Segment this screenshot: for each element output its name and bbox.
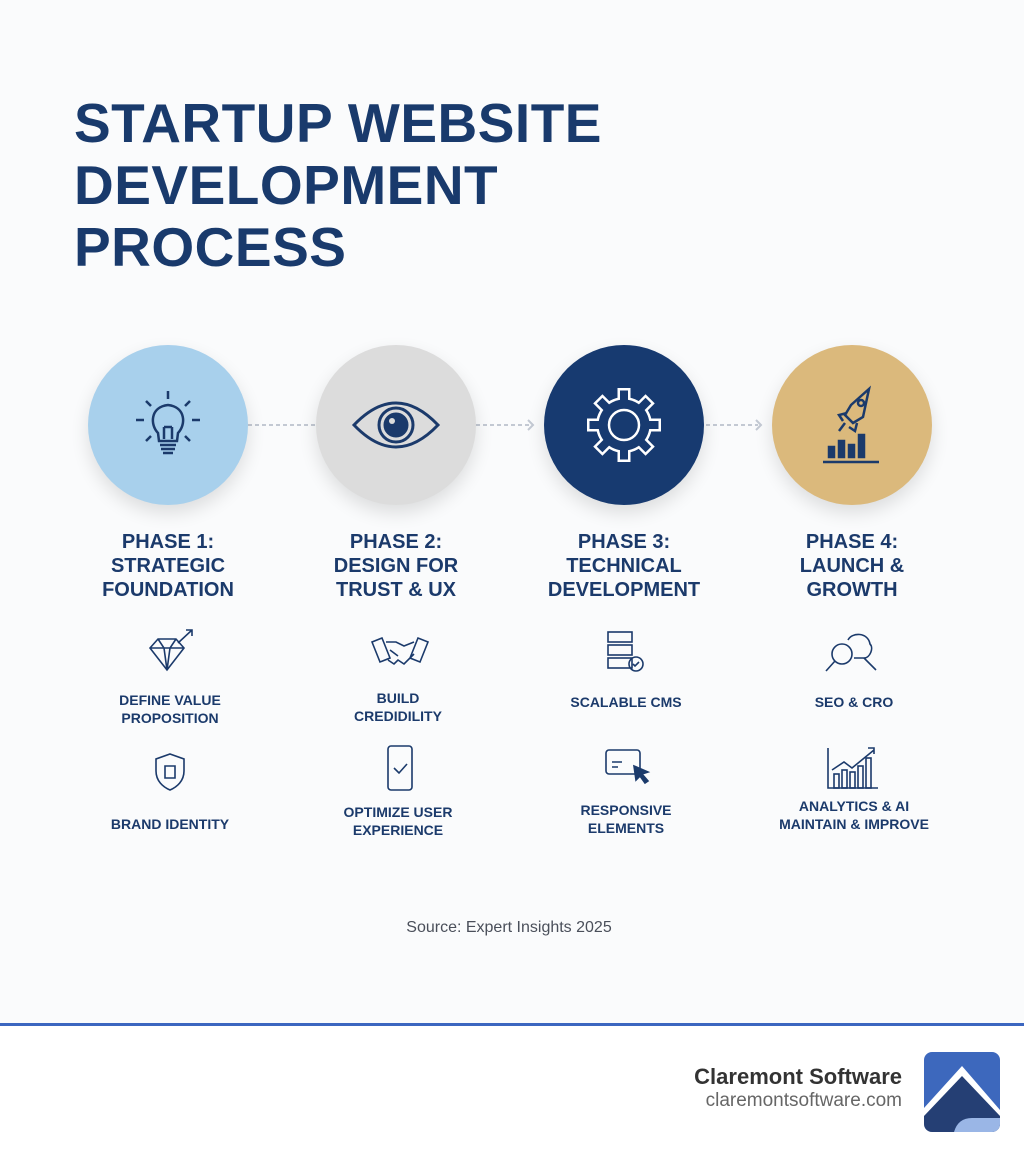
text: PHASE 3: <box>578 531 670 553</box>
label: define value proposition <box>119 692 221 726</box>
label: analytics & ai <box>779 798 929 832</box>
text: DESIGN FOR <box>334 555 458 577</box>
logo <box>924 1052 1000 1132</box>
icon: handshake <box>371 637 429 665</box>
arrows between circles <box>248 419 762 431</box>
label: scalable cms: SCALABLE CMS <box>570 694 682 710</box>
text: GROWTH <box>806 579 898 601</box>
label: analytics & ai: MAINTAIN & IMPROVE <box>779 816 929 832</box>
footer brand text: Claremont Software <box>694 1064 902 1089</box>
label: build credibility <box>354 690 442 724</box>
footer brand text: claremontsoftware.com <box>706 1090 902 1111</box>
label: build credibility: CREDIDILITY <box>354 708 442 724</box>
icon: phone <box>387 745 413 791</box>
label: responsive elements <box>580 802 672 836</box>
text: TECHNICAL <box>566 555 682 577</box>
phase headings: FOUNDATION <box>102 579 234 601</box>
label: define value proposition: PROPOSITION <box>121 710 219 726</box>
source: Source: Expert Insights 2025 <box>406 919 612 936</box>
label: optimize user experience: EXPERIENCE <box>353 822 443 838</box>
circle: phase 4 rocket <box>772 345 932 505</box>
label: build credibility: BUILD <box>377 690 419 706</box>
text: DEVELOPMENT <box>548 579 700 601</box>
text: PHASE 4: <box>806 531 898 553</box>
icon: server <box>607 631 644 672</box>
label: responsive elements: RESPONSIVE <box>580 802 672 818</box>
footer brand text <box>694 1064 902 1111</box>
icon: magnifier brain <box>826 634 876 672</box>
text: LAUNCH & <box>800 555 904 577</box>
title: DEVELOPMENT <box>74 154 498 216</box>
title: STARTUP WEBSITE <box>74 92 602 154</box>
label: define value proposition: DEFINE VALUE <box>119 692 221 708</box>
footer divider <box>0 1023 1024 1026</box>
text: PHASE 2: <box>350 531 442 553</box>
icon: shield <box>155 753 185 791</box>
circle: phase 2 eye <box>316 345 476 505</box>
icon: analytics chart <box>827 747 878 789</box>
icon: browser cursor <box>605 749 650 784</box>
title: PROCESS <box>74 216 346 278</box>
phase headings <box>102 531 234 601</box>
text: TRUST & UX <box>336 579 456 601</box>
label: optimize user experience: OPTIMIZE USER <box>344 804 452 820</box>
label: responsive elements: ELEMENTS <box>588 820 664 836</box>
title <box>74 92 602 278</box>
label: seo & cro: SEO & CRO <box>815 694 893 710</box>
label: brand identity: BRAND IDENTITY <box>111 816 229 832</box>
label: analytics & ai: ANALYTICS & AI <box>799 798 909 814</box>
icon: diamond <box>149 629 193 672</box>
label: optimize user experience <box>344 804 452 838</box>
phase headings: PHASE 1: <box>122 531 214 553</box>
circle: phase 3 gear <box>544 345 704 505</box>
circle: phase 1 lightbulb <box>88 345 248 505</box>
phase headings: STRATEGIC <box>111 555 225 577</box>
